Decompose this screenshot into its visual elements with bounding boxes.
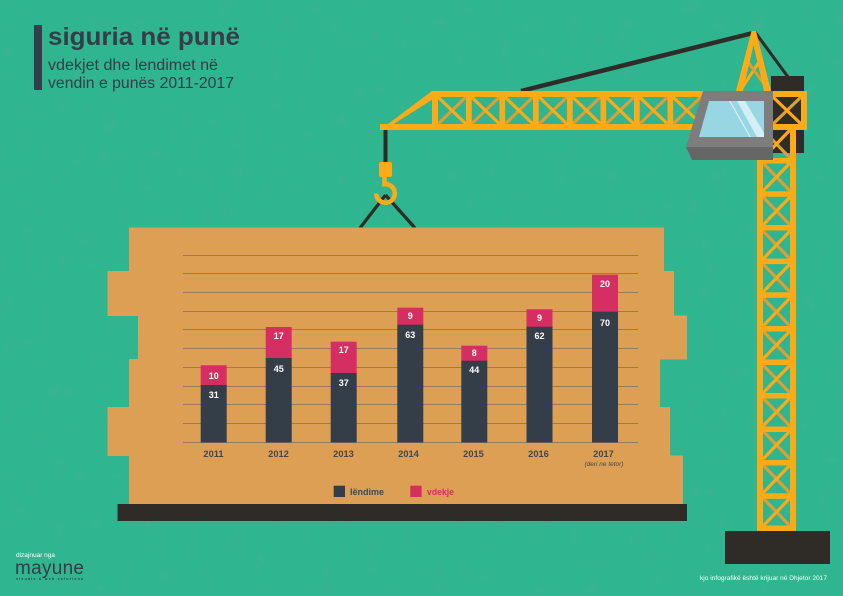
bar 2011 [201, 365, 227, 442]
bar 2013: 37 [339, 378, 349, 388]
year labels: (deri ne tetor) [584, 461, 624, 468]
bar 2012 [266, 327, 292, 442]
title: siguria në punë [48, 23, 240, 51]
bar 2017 [592, 275, 618, 442]
year labels: 2017 [593, 449, 614, 459]
year labels [203, 449, 624, 468]
bar 2017: 70 [600, 318, 610, 328]
bar 2014 [397, 308, 423, 442]
bar 2015 [461, 346, 487, 442]
bar 2012: 17 [274, 331, 284, 341]
planks [108, 228, 687, 504]
logo: mayune [15, 558, 84, 579]
board base [118, 504, 687, 521]
subtitle [48, 57, 234, 92]
crane cables [521, 32, 788, 91]
legend: vdekje [427, 487, 454, 498]
bar 2015: 8 [472, 348, 477, 358]
operator cab [686, 91, 773, 160]
wooden board [108, 228, 687, 521]
mast A-frame [736, 31, 771, 91]
bar 2011: 10 [209, 371, 219, 381]
bar 2017: 20 [600, 279, 610, 289]
year labels: 2014 [398, 449, 420, 459]
bar 2016: 9 [537, 313, 542, 323]
bar 2012: 45 [274, 364, 284, 374]
designer credit [15, 552, 84, 581]
bar 2016 [526, 309, 552, 442]
crane [360, 31, 830, 564]
jib [380, 91, 807, 130]
bar chart [183, 256, 638, 498]
bar 2011: 31 [209, 390, 219, 400]
subtitle: vendin e punës 2011-2017 [48, 75, 234, 92]
bar 2014: 9 [408, 311, 413, 321]
tower base [725, 531, 830, 564]
bar 2013: 17 [339, 345, 349, 355]
bar 2015: 44 [469, 365, 479, 375]
bar 2016: 62 [534, 331, 545, 341]
year labels: 2012 [268, 449, 289, 459]
tower [757, 130, 796, 531]
subtitle: vdekjet dhe lendimet në [48, 57, 218, 74]
title accent bar [34, 25, 42, 90]
year labels: 2016 [528, 449, 549, 459]
counterweight block [771, 76, 804, 153]
legend [334, 486, 454, 498]
footer note: kjo infografikë është krijuar në Dhjetor 2017 [700, 575, 828, 582]
bar 2013 [331, 342, 357, 442]
hook assembly [360, 130, 415, 228]
year labels: 2013 [333, 449, 354, 459]
grid lines [183, 256, 638, 442]
title block [34, 23, 240, 92]
designer credit: visuals & web solutions [16, 577, 83, 581]
year labels: 2011 [203, 449, 224, 459]
sling ropes [360, 195, 415, 228]
year labels: 2015 [463, 449, 484, 459]
legend: lëndime [350, 487, 384, 498]
cab window [699, 101, 764, 137]
designer credit: dizajnuar nga [16, 552, 56, 559]
bar 2014: 63 [405, 330, 415, 340]
